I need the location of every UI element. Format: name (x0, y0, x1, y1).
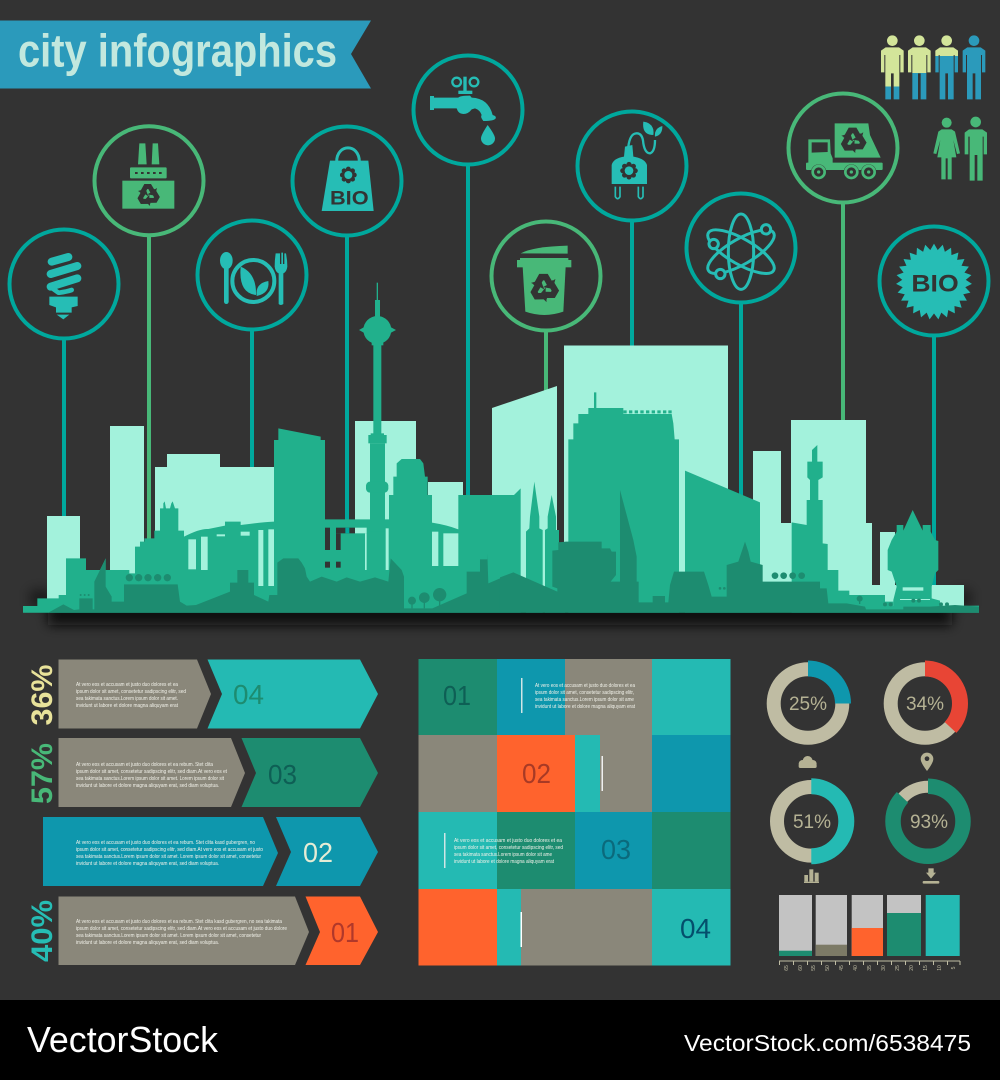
grid row 4: 04 (680, 913, 711, 944)
arrow row 03 (58, 738, 378, 807)
donut chart 34%: 34% (906, 694, 944, 715)
arrow row 04: 04 (233, 679, 264, 710)
icon circle: eco plug (578, 112, 686, 220)
color block grid (418, 659, 730, 966)
dark foreground buildings, left half (48, 553, 500, 613)
icon circle: organic food plate (198, 220, 306, 330)
footer bar: VectorStock.com/6538475 (684, 1030, 971, 1056)
footer bar (0, 1000, 1000, 1080)
arrow row 01: sea takimata sanctus.Lorem ipsum dolor sit amet. Lorem ipsum dolor sit amet, consetetur (76, 933, 261, 939)
arrow row 02: 02 (303, 837, 333, 868)
grid row 3: 03 (601, 834, 631, 865)
arrow row 02: sea takimata sanctus.Lorem ipsum dolor sit amet. Lorem ipsum dolor sit amet, consetetur (76, 854, 261, 860)
donut chart 34% (890, 668, 960, 738)
icon circle: recycling bin (492, 222, 600, 330)
icon: bar chart (804, 869, 819, 883)
mid green buildings, right half (500, 392, 979, 613)
chart axis: 25 (895, 965, 901, 971)
arrow row 03: At vero eos et accusam et justo duo dolores et ea rebum. Stet clita (76, 762, 213, 768)
ground strip (23, 606, 979, 613)
arrow row 04: invidunt ut labore et dolore magna aliquyam erat (76, 703, 179, 709)
dark foreground buildings, right half (500, 490, 979, 613)
mid green buildings, left half (23, 428, 500, 613)
grid row 3: At vero eos et accusam et justo duo dolores et ea (454, 838, 562, 844)
chart axis: 45 (839, 965, 845, 971)
arrow row 04: At vero eos et accusam et justo duo dolores et ea (76, 682, 178, 688)
bar 4 (887, 895, 921, 956)
grid row 3: ipsum dolor sit amet, consetetur sadipscing elitr, sed (454, 845, 563, 851)
grid row 3: invidunt ut labore et dolore magna aliquyam erat (454, 859, 554, 865)
percentage label 40%: 40% (26, 900, 59, 962)
stacked bar chart (779, 895, 960, 971)
donut chart 25%: 25% (789, 694, 827, 715)
chart axis: 30 (881, 965, 887, 971)
donut chart 51% (776, 786, 846, 856)
grid row 1: ipsum dolor sit amet, consetetur sadipscing elitr, (535, 690, 634, 696)
grid row 1: At vero eos et accusam et justo duo dolores et ea (535, 683, 635, 689)
chart axis: 55 (811, 965, 817, 971)
chart axis: 35 (867, 965, 873, 971)
title banner: city infographics (18, 24, 337, 76)
city skyline (23, 283, 979, 613)
grid row 3 (418, 812, 730, 889)
bar 3 (852, 895, 883, 956)
donut chart 25% (773, 668, 843, 738)
chart axis: 15 (923, 965, 929, 971)
grid row 1: 01 (443, 680, 471, 711)
percentage label 57%: 57% (26, 743, 59, 804)
bar 1 (779, 895, 812, 956)
chart axis: 60 (798, 965, 804, 971)
arrow row 03: invidunt ut labore et dolore magna aliquyam erat, sed diam voluptua. (76, 783, 219, 789)
skyline shadow (30, 590, 971, 625)
icon circle: bio star badge: BIO (911, 271, 959, 298)
chart axis: 65 (784, 965, 790, 971)
light background buildings (47, 346, 964, 608)
connector lines from icons to skyline (64, 164, 934, 600)
arrow row 04: sea takimata sanctus.Lorem ipsum dolor sit amet. (76, 696, 178, 702)
grid row 4 (418, 889, 730, 966)
icon circle: bio star badge (880, 226, 988, 336)
icon circle: water tap (414, 56, 522, 164)
arrow row 02: ipsum dolor sit amet, consetetur sadipscing elitr, sed diam.At vero eos et accusam et justo (76, 847, 263, 853)
donut chart 93% (893, 786, 963, 856)
icon: cloud (799, 756, 817, 768)
icon: download (923, 868, 939, 884)
arrow row 01: ipsum dolor sit amet, consetetur sadipscing elitr, sed diam.At vero eos et accusam et justo duo dolore (76, 926, 287, 932)
people pictograms: population share (881, 35, 985, 99)
icon circle: bio shopping bag: BIO (330, 188, 369, 209)
grid row 2 (418, 735, 730, 812)
icon circle: factory recycling (94, 126, 204, 235)
chart axis: 50 (825, 965, 831, 971)
bar 2 (816, 895, 847, 956)
grid row 1 (418, 659, 730, 735)
footer bar: VectorStock (27, 1019, 219, 1060)
grid row 3: sea takimata sanctus.Lorem ipsum dolor sit ame (454, 852, 552, 858)
arrow row 02: At vero eos et accusam et justo duo dolores et ea rebum. Stet clita kasd gubergren, no (76, 840, 255, 846)
icon circle: atom (686, 194, 796, 302)
icon circle: energy saving bulb (10, 230, 118, 338)
arrow row 03: 03 (268, 759, 297, 790)
icon circle: recycling truck (788, 94, 898, 202)
donut chart 93%: 93% (910, 812, 948, 833)
chart axis: 40 (853, 965, 859, 971)
grid row 1: invidunt ut labore et dolore magna aliquyam erat (535, 704, 635, 710)
arrow row 04 (58, 660, 378, 728)
chart axis (779, 961, 960, 971)
arrow row 01 (58, 896, 378, 965)
grid row 1: sea takimata sanctus.Lorem ipsum dolor sit ame (535, 697, 634, 703)
chart axis: 5 (951, 966, 957, 969)
percentage label 36%: 36% (26, 664, 59, 726)
arrow row 01: At vero eos et accusam et justo duo dolores et ea rebum. Stet clita kasd gubergren, no sea takimata (76, 919, 282, 925)
donut chart 51%: 51% (793, 812, 831, 833)
arrow row 01: 01 (331, 917, 359, 948)
chart axis: 10 (937, 965, 943, 971)
tv tower (359, 283, 396, 532)
arrow row 02 (43, 817, 378, 886)
arrow row 03: ipsum dolor sit amet, consetetur sadipscing elitr, sed diam.At vero eos et (76, 769, 227, 775)
icon: map pin (921, 753, 933, 771)
arrow row 01: invidunt ut labore et dolore magna aliquyam erat, sed diam voluptua. (76, 940, 219, 946)
arrow row 03: sea takimata sanctus.Lorem ipsum dolor sit amet. Lorem ipsum dolor sit (76, 776, 224, 782)
icon circle: bio shopping bag (292, 126, 402, 236)
people pictograms: woman and man (933, 117, 987, 181)
arrow row 02: invidunt ut labore et dolore magna aliquyam erat, sed diam voluptua. (76, 861, 219, 867)
chart axis: 20 (909, 965, 915, 971)
grid row 2: 02 (522, 758, 551, 789)
bar 5 (926, 895, 960, 956)
arrow row 04: ipsum dolor sit amet, consetetur sadipscing elitr, sed (76, 689, 186, 695)
